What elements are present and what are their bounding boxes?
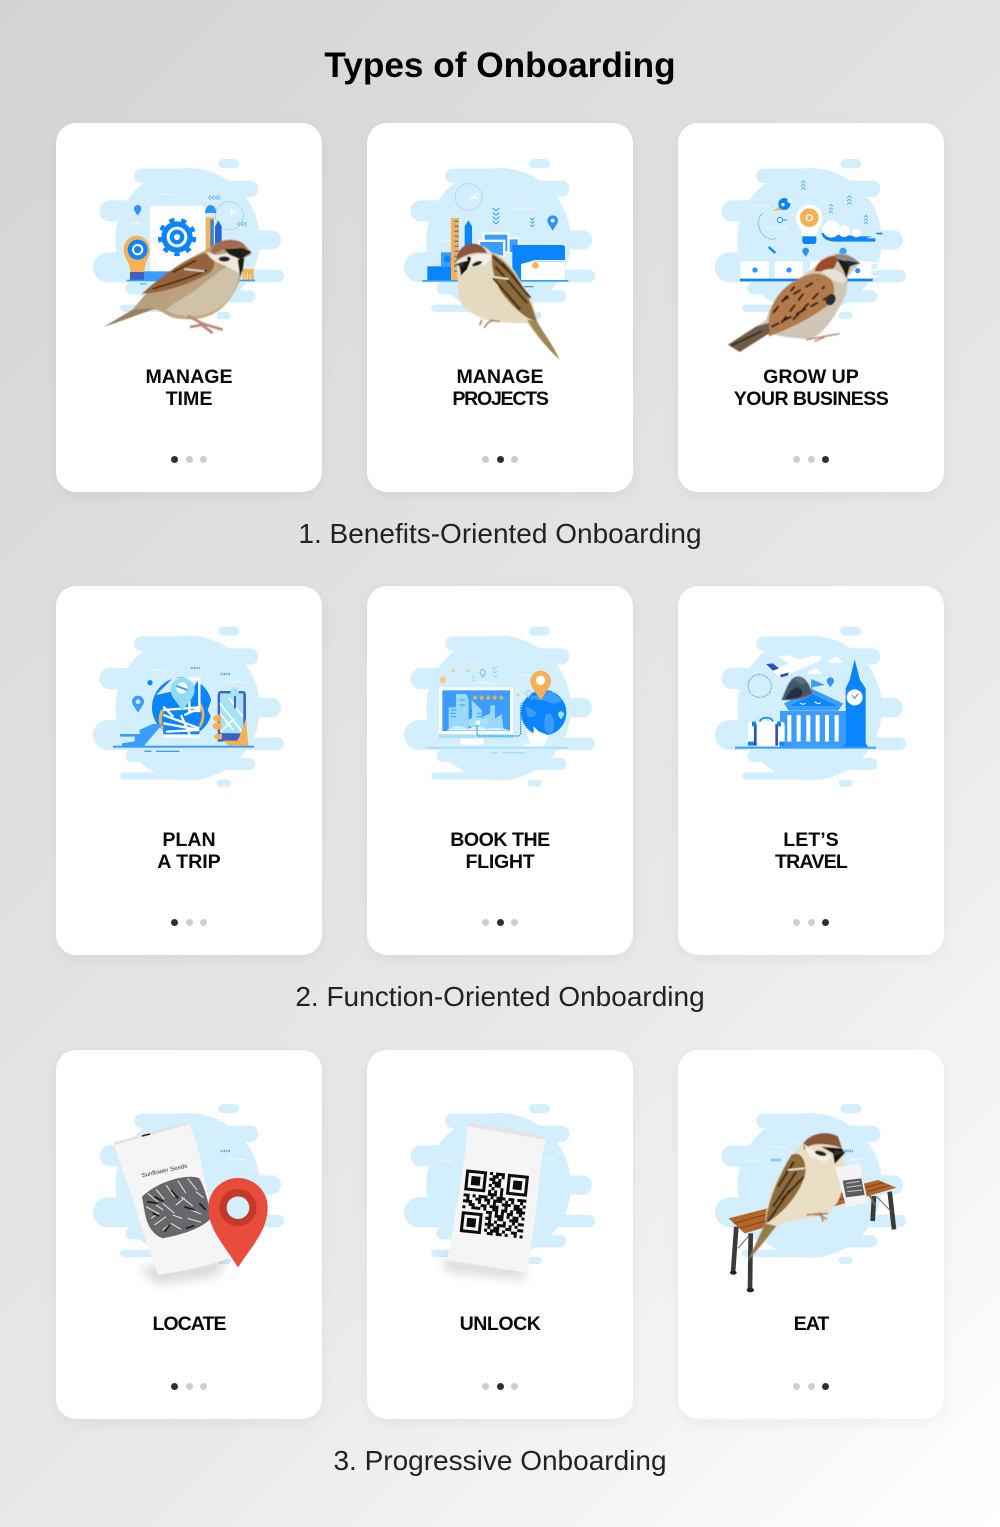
label: LET’S <box>783 829 839 851</box>
label: EAT <box>794 1313 828 1335</box>
pagination dots <box>793 1383 829 1390</box>
panel: eat <box>678 1050 944 1419</box>
label: PROJECTS <box>452 388 548 410</box>
label <box>157 829 221 873</box>
pagination dots <box>482 1383 518 1390</box>
illustration: seed bag and location pin: Sunflower Seeds <box>141 1163 188 1179</box>
pagination dots <box>171 919 207 926</box>
pagination dots <box>482 456 518 463</box>
illustration: sparrow with gear <box>93 159 284 334</box>
title: Types of Onboarding <box>324 46 676 85</box>
label: TIME <box>166 388 212 410</box>
label: YOUR BUSINESS <box>734 388 888 410</box>
label <box>450 829 550 873</box>
panel: manage projects <box>367 123 633 492</box>
illustration: QR code bag <box>404 1104 595 1282</box>
panel: let's travel <box>678 586 944 955</box>
caption: progressive: 3. Progressive Onboarding <box>333 1445 667 1476</box>
panel: book the flight <box>367 586 633 955</box>
label: MANAGE <box>145 366 233 388</box>
panel: grow up your business <box>678 123 944 492</box>
label: TRAVEL <box>775 851 847 873</box>
illustration: sparrow with lightbulb <box>715 159 906 352</box>
illustration: sparrow on bench <box>715 1104 906 1292</box>
pagination dots <box>793 456 829 463</box>
panel: plan a trip <box>56 586 322 955</box>
label <box>452 366 548 410</box>
pagination dots <box>171 456 207 463</box>
pagination dots <box>482 919 518 926</box>
illustration: landmark and plane <box>715 626 906 787</box>
pagination dots <box>171 1383 207 1390</box>
label: PLAN <box>162 829 216 851</box>
panel: locate <box>56 1050 322 1419</box>
label: BOOK THE <box>450 829 550 851</box>
label: A TRIP <box>157 851 221 873</box>
label: MANAGE <box>456 366 544 388</box>
illustration: seed bag and location pin <box>93 1104 284 1288</box>
label <box>145 366 233 410</box>
pagination dots <box>793 919 829 926</box>
illustration: map and phone <box>93 626 284 787</box>
label <box>775 829 848 873</box>
panel: unlock <box>367 1050 633 1419</box>
illustration: monitor and globe <box>404 626 595 787</box>
label: LOCATE <box>152 1313 226 1335</box>
label: GROW UP <box>763 366 859 388</box>
label: FLIGHT <box>466 851 534 873</box>
label <box>734 366 888 410</box>
label: UNLOCK <box>460 1313 540 1335</box>
panel: manage time <box>56 123 322 492</box>
caption: function-oriented: 2. Function-Oriented Onboarding <box>295 981 705 1012</box>
caption: benefits-oriented: 1. Benefits-Oriented Onboarding <box>298 518 702 549</box>
illustration: sparrow with workspace <box>404 159 595 360</box>
